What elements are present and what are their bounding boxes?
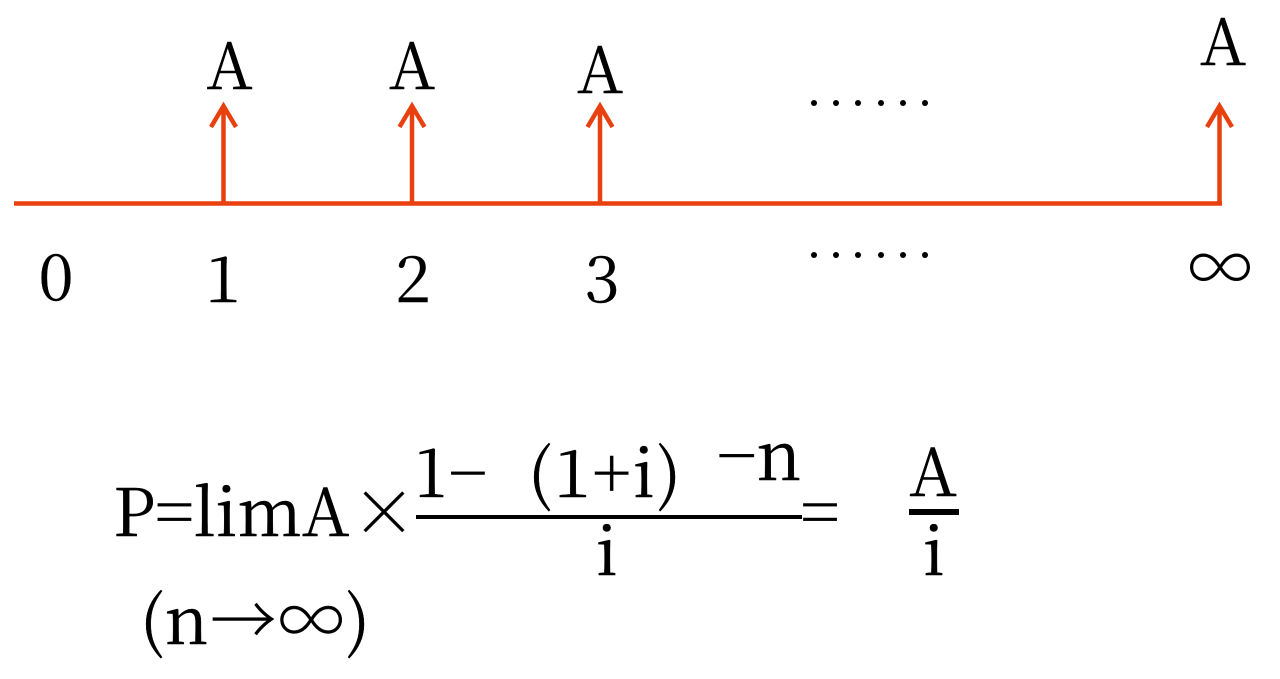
period labels: ∞ [1188, 218, 1252, 310]
fraction numerator: 1− [415, 421, 487, 516]
fraction bar [416, 515, 802, 519]
fraction numerator [415, 403, 801, 516]
arrow at infinity [1207, 106, 1232, 203]
result fraction [909, 420, 959, 594]
period labels [38, 218, 1252, 321]
amount labels: A [577, 20, 623, 112]
period labels: 1 [205, 229, 241, 321]
arrow at period 1 [211, 106, 236, 203]
result fraction: A [909, 420, 957, 515]
limit condition: (n→∞) [140, 568, 370, 663]
period labels: 0 [38, 227, 74, 319]
result fraction: i [923, 499, 945, 594]
period labels: 3 [584, 229, 620, 321]
lower ellipsis [811, 252, 928, 258]
upper ellipsis [811, 100, 928, 106]
arrow at period 3 [588, 106, 612, 203]
multiplication sign: × [351, 460, 417, 555]
amount labels: A [389, 16, 435, 108]
fraction denominator: i [596, 499, 618, 594]
period labels: 2 [395, 229, 431, 321]
arrow at period 2 [400, 106, 424, 203]
amount labels [207, 0, 1246, 112]
fraction numerator: (1+i) [528, 421, 681, 516]
amount labels: A [207, 16, 253, 108]
equals sign: = [801, 460, 839, 555]
fraction numerator: −n [717, 403, 801, 500]
timeline axis [14, 201, 1222, 206]
formula left side: P=limA [113, 460, 349, 555]
